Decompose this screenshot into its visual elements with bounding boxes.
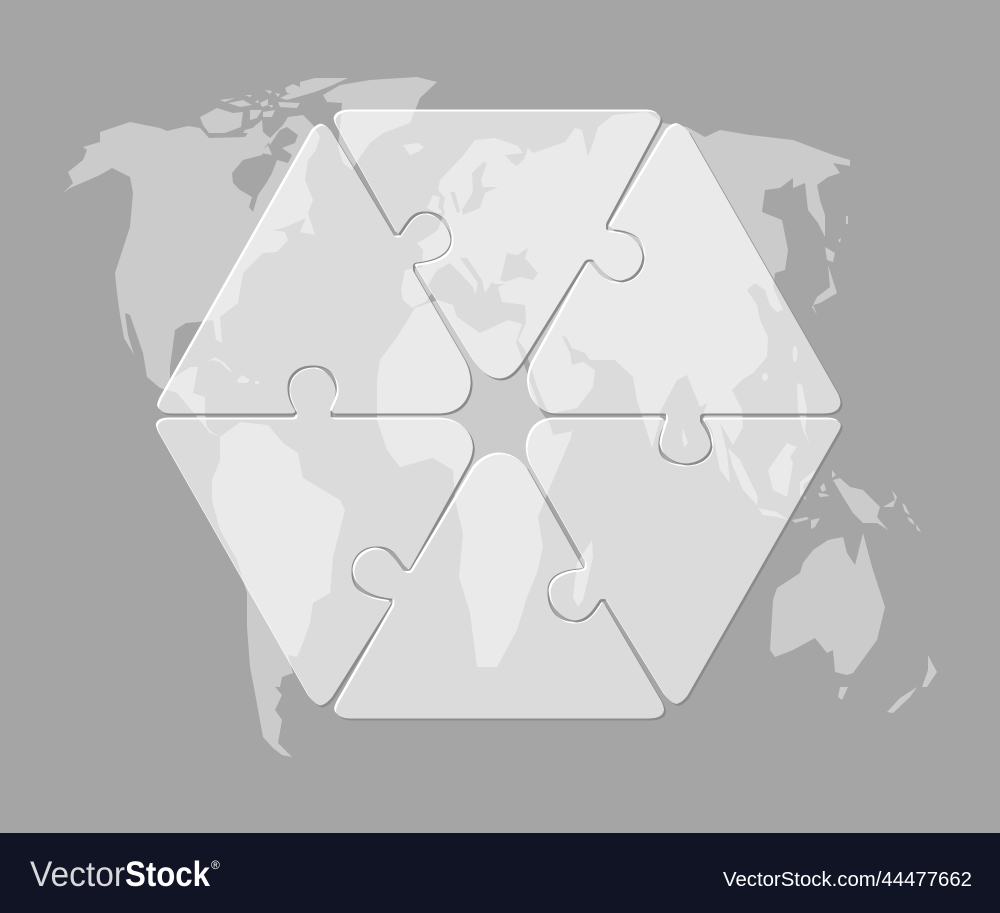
puzzle: lower-left piece [156, 367, 474, 707]
puzzle: top piece [334, 110, 662, 380]
Japan [825, 247, 835, 262]
puzzle: bottom piece [334, 453, 666, 720]
Caribbean islands [207, 357, 233, 373]
Southeast Asia islands [682, 346, 836, 529]
Kuril islands [846, 216, 848, 224]
Eurasia [401, 112, 850, 483]
New Zealand [922, 655, 937, 687]
Australia [770, 533, 885, 675]
footer image id: VectorStock.com/44477662 [723, 869, 972, 891]
Africa [377, 300, 573, 667]
South America [212, 422, 345, 757]
puzzle: right piece [527, 124, 842, 465]
Tasmania [838, 687, 848, 700]
Greenland [323, 77, 437, 170]
Pacific islands [883, 490, 921, 532]
Madagascar [573, 540, 593, 607]
footer logo: VectorStock [30, 855, 210, 894]
footer bar [0, 833, 1000, 913]
North America [63, 115, 320, 437]
puzzle: left piece [158, 124, 472, 415]
puzzle: lower-right piece [526, 418, 842, 706]
Arctic islands [200, 78, 348, 155]
inland seas [232, 127, 538, 282]
Iceland [403, 143, 424, 155]
footer registered mark: ® [211, 858, 220, 872]
British Isles [427, 195, 443, 213]
New Guinea [833, 478, 888, 530]
world map [63, 77, 937, 757]
